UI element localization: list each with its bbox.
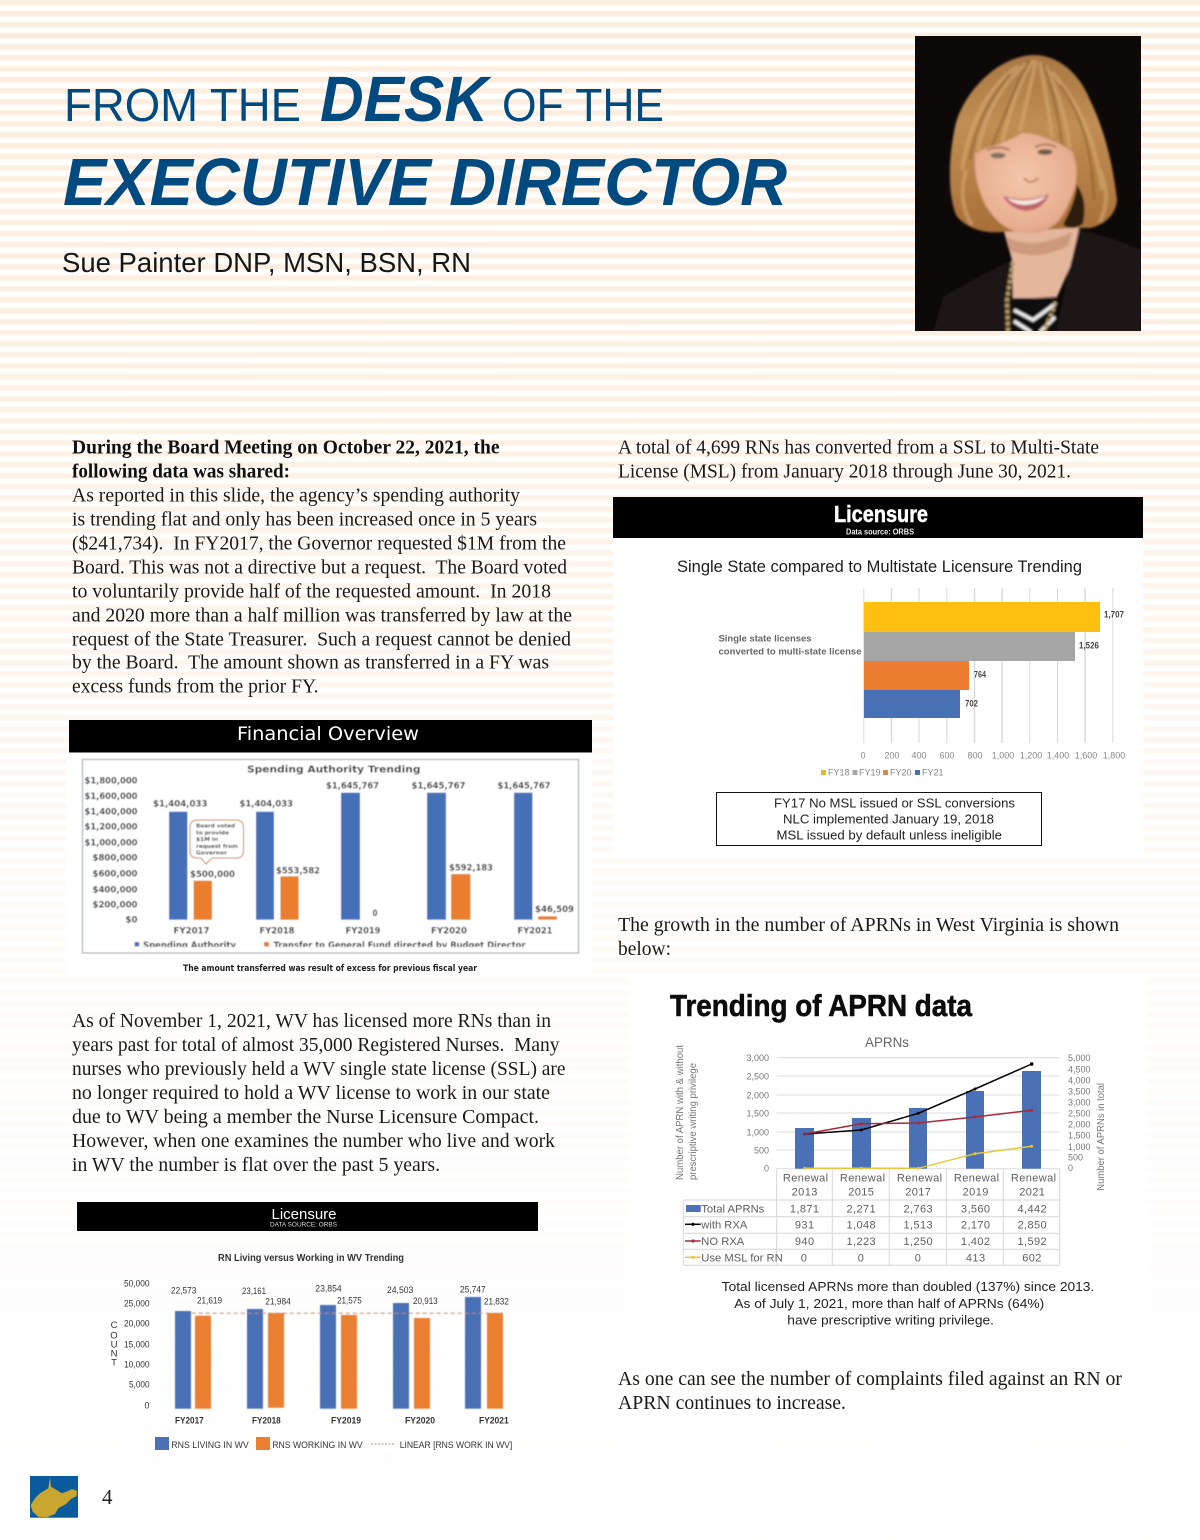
text block: board meeting intro: During the Board Meeting on October 22, 2021, the xyxy=(72,438,500,458)
legend: LINEAR [RNS WORK IN WV] xyxy=(400,1440,512,1450)
legend: FY18 xyxy=(828,768,850,778)
spending authority bar chart: $600,000 xyxy=(92,870,138,880)
spending authority bar chart: FY2019 xyxy=(346,926,380,936)
text block: board meeting intro: is trending flat and only has been increased once in 5 years xyxy=(72,510,537,530)
text block: complaints: As one can see the number of complaints filed against an RN or xyxy=(618,1369,1123,1390)
x axis labels xyxy=(175,1416,509,1426)
data table: 2017 xyxy=(905,1186,931,1198)
spending authority bar chart: Spending Authority Trending xyxy=(247,764,420,776)
combo chart: 1,500 xyxy=(1068,1130,1091,1140)
y axis labels xyxy=(124,1278,150,1412)
text block: board meeting intro: As reported in this slide, the agency’s spending authority xyxy=(72,486,520,506)
combo chart: 0 xyxy=(764,1163,769,1173)
x axis labels: FY2021 xyxy=(479,1416,509,1426)
count axis title: O xyxy=(110,1330,118,1342)
count axis title: N xyxy=(111,1348,118,1360)
panel: single state vs multistate licensure xyxy=(613,497,1143,855)
text block: RNs licensed: in WV the number is flat over the past 5 years. xyxy=(72,1155,440,1176)
spending authority bar chart: $1,400,000 xyxy=(84,808,138,818)
combo chart: 3,000 xyxy=(1068,1097,1091,1107)
data table: Renewal xyxy=(954,1172,1000,1184)
data table: 602 xyxy=(1022,1252,1042,1264)
legend: RNS LIVING IN WV xyxy=(171,1440,249,1450)
financial overview header bar xyxy=(69,720,592,752)
data table: 2015 xyxy=(848,1186,874,1198)
data table: 1,402 xyxy=(961,1236,990,1248)
horizontal bar chart: 600 xyxy=(939,750,955,760)
spending authority bar chart: $800,000 xyxy=(92,854,138,864)
horizontal bar chart: 800 xyxy=(967,750,983,760)
value labels xyxy=(171,1284,509,1308)
horizontal bar chart: 1,800 xyxy=(1103,750,1125,760)
text block: RNs licensed: no longer required to hold a WV license to work in our state xyxy=(72,1083,550,1104)
horizontal bar chart: 1,200 xyxy=(1020,750,1042,760)
horizontal bar chart: 1,526 xyxy=(1079,640,1099,650)
value labels: 22,573 xyxy=(171,1286,196,1296)
title: OF THE xyxy=(502,79,664,131)
data table: 0 xyxy=(858,1252,864,1264)
spending authority bar chart: $1,200,000 xyxy=(84,822,138,832)
data table: 1,871 xyxy=(790,1204,819,1216)
text block: board meeting intro: and 2020 more than a half million was transferred by law at the xyxy=(72,606,572,626)
data table: 1,513 xyxy=(904,1220,933,1232)
spending authority bar chart: $1,600,000 xyxy=(84,792,138,802)
value labels: 23,161 xyxy=(242,1286,266,1297)
licensure header bar xyxy=(77,1202,538,1231)
text block: complaints xyxy=(618,1369,1123,1414)
data table: 3,560 xyxy=(961,1204,990,1216)
licensure header bar: Data source: ORBS xyxy=(846,528,915,536)
combo chart xyxy=(675,1045,1107,1191)
data table: 0 xyxy=(915,1252,921,1264)
combo chart: 1,000 xyxy=(1068,1142,1091,1152)
data table: 4,442 xyxy=(1018,1204,1047,1216)
APRN caption: have prescriptive writing privilege. xyxy=(787,1312,994,1328)
data table: 940 xyxy=(795,1236,814,1248)
callout: board vote xyxy=(190,820,244,864)
combo chart: 3,000 xyxy=(746,1053,769,1063)
horizontal bar chart: 764 xyxy=(974,670,986,680)
spending authority bar chart: FY2018 xyxy=(260,926,294,936)
text block: RNs licensed: However, when one examines the number who live and work xyxy=(72,1131,555,1152)
data table: 2021 xyxy=(1019,1186,1045,1198)
spending authority bar chart: $1,645,767 xyxy=(412,782,466,792)
text block: APRN growth xyxy=(618,915,1119,960)
y axis labels: 25,000 xyxy=(124,1298,150,1310)
combo chart: Number of APRNs in total xyxy=(1096,1083,1107,1191)
y axis labels: 5,000 xyxy=(129,1380,150,1390)
value labels: 21,619 xyxy=(197,1296,222,1306)
data table: 1,048 xyxy=(847,1220,876,1232)
legend: FY19 xyxy=(859,768,881,778)
data table: NO RXA xyxy=(701,1236,745,1248)
combo chart: 4,000 xyxy=(1068,1075,1091,1085)
data table: Total APRNs xyxy=(701,1204,765,1216)
y axis labels: 10,000 xyxy=(124,1360,150,1370)
spending authority bar chart: $500,000 xyxy=(190,870,235,880)
note box: NLC implemented January 19, 2018 xyxy=(783,812,994,826)
horizontal bar chart: 1,707 xyxy=(1104,610,1124,620)
spending authority bar chart: $1,645,767 xyxy=(326,782,379,792)
panel: RN living versus working chart xyxy=(77,1202,538,1450)
callout: board vote: to provide xyxy=(196,830,230,836)
combo chart: 1,000 xyxy=(746,1127,769,1137)
horizontal bar chart: 400 xyxy=(911,750,927,760)
data table: 2,850 xyxy=(1018,1220,1047,1232)
data table xyxy=(683,1169,1060,1265)
spending authority bar chart: Transfer to General Fund directed by Budget Director xyxy=(274,941,526,951)
spending authority bar chart: Spending Authority xyxy=(143,941,236,951)
spending authority bar chart: FY2021 xyxy=(518,926,552,936)
horizontal bar chart: 702 xyxy=(965,698,978,708)
horizontal bar chart: 1,600 xyxy=(1075,750,1097,760)
text block: board meeting intro xyxy=(72,438,572,698)
combo chart: 2,500 xyxy=(1068,1108,1091,1118)
text block: RNs licensed: due to WV being a member the Nurse Licensure Compact. xyxy=(72,1107,539,1128)
horizontal bar chart: converted to multi-state license xyxy=(718,646,862,658)
value labels: 21,575 xyxy=(337,1296,362,1306)
value labels: 25,747 xyxy=(460,1284,486,1296)
data table: 1,250 xyxy=(904,1236,933,1248)
data table: Renewal xyxy=(840,1172,886,1184)
y axis labels: 0 xyxy=(144,1400,150,1412)
horizontal bar chart: Single state licenses xyxy=(718,634,812,644)
spending authority bar chart xyxy=(82,760,578,953)
text block: board meeting intro: request of the State Treasurer. Such a request cannot be denied xyxy=(72,630,571,650)
spending authority bar chart: 0 xyxy=(372,909,378,919)
spending authority bar chart: FY2017 xyxy=(174,926,210,936)
data table: Use MSL for RN xyxy=(701,1252,783,1264)
data table: 0 xyxy=(801,1252,807,1264)
panel: trending of APRN data xyxy=(629,975,1147,1335)
data table: 931 xyxy=(795,1220,814,1232)
title xyxy=(63,63,787,220)
title: DESK xyxy=(320,63,493,135)
licensure header bar xyxy=(613,497,1143,538)
spending authority bar chart: $553,582 xyxy=(276,866,320,876)
legend: FY20 xyxy=(890,768,912,778)
licensure header bar: DATA SOURCE: ORBS xyxy=(270,1222,338,1228)
y axis labels: 50,000 xyxy=(124,1278,150,1290)
title: EXECUTIVE DIRECTOR xyxy=(63,145,787,220)
combo chart: Number of APRN with & without xyxy=(675,1045,686,1180)
horizontal bar chart: 1,400 xyxy=(1047,750,1069,760)
combo chart: 2,000 xyxy=(1068,1119,1091,1129)
data table: 413 xyxy=(966,1252,985,1264)
note box: MSL issued by default unless ineligible xyxy=(776,828,1002,842)
combo chart: 4,500 xyxy=(1068,1064,1091,1074)
legend xyxy=(821,768,944,778)
text block: APRN growth: The growth in the number of APRNs in West Virginia is shown xyxy=(618,915,1119,936)
portrait photo xyxy=(915,36,1141,332)
text block: RNs licensed xyxy=(72,1011,566,1176)
text block: board meeting intro: following data was shared: xyxy=(72,462,290,482)
callout: board vote: Board voted xyxy=(196,824,235,830)
text block: MSL conversions: A total of 4,699 RNs has converted from a SSL to Multi-State xyxy=(618,438,1099,458)
text block: board meeting intro: by the Board. The amount shown as transferred in a FY was xyxy=(72,652,549,674)
licensure header bar: Licensure xyxy=(272,1207,336,1223)
text block: MSL conversions: License (MSL) from January 2018 through June 30, 2021. xyxy=(618,462,1071,482)
spending authority bar chart: $1,000,000 xyxy=(84,838,138,848)
combo chart: 500 xyxy=(754,1145,769,1155)
title: FROM THE xyxy=(64,79,301,131)
y axis labels: 20,000 xyxy=(124,1318,150,1330)
legend xyxy=(155,1437,512,1450)
horizontal bar chart: 0 xyxy=(860,750,866,760)
text block: MSL conversions xyxy=(618,438,1099,482)
note box xyxy=(716,792,1042,846)
horizontal bar chart: 200 xyxy=(884,750,900,760)
licensure header bar: Licensure xyxy=(834,501,928,527)
data table: 2,170 xyxy=(961,1220,990,1232)
text block: board meeting intro: excess funds from the prior FY. xyxy=(72,676,318,698)
spending authority bar chart: $0 xyxy=(126,916,138,926)
data table: Renewal xyxy=(783,1172,829,1184)
data table: 2013 xyxy=(792,1186,818,1198)
data table: with RXA xyxy=(700,1220,748,1232)
icon: West Virginia state map xyxy=(30,1476,78,1518)
combo chart: prescriptive writing privilege xyxy=(688,1063,699,1180)
text block: RNs licensed: years past for total of almost 35,000 Registered Nurses. Many xyxy=(72,1035,560,1056)
x axis labels: FY2020 xyxy=(405,1416,435,1426)
spending authority bar chart: FY2020 xyxy=(431,926,467,936)
APRN caption xyxy=(722,1279,1094,1328)
combo chart: 0 xyxy=(1068,1163,1073,1173)
combo chart: 2,500 xyxy=(746,1071,769,1081)
spending authority bar chart: $1,645,767 xyxy=(498,782,550,792)
horizontal bar chart: 1,000 xyxy=(992,750,1014,760)
combo chart: 3,500 xyxy=(1068,1086,1091,1096)
value labels: 23,854 xyxy=(315,1284,342,1294)
data table: 1,592 xyxy=(1018,1236,1047,1248)
x axis labels: FY2019 xyxy=(331,1416,361,1426)
byline: Sue Painter DNP, MSN, BSN, RN xyxy=(62,247,471,278)
spending authority bar chart: $46,509 xyxy=(535,905,574,915)
callout: board vote: Governor xyxy=(196,850,228,856)
value labels: 21,984 xyxy=(265,1296,291,1308)
value labels: 24,503 xyxy=(387,1285,413,1296)
spending authority bar chart: $200,000 xyxy=(92,900,138,910)
combo chart: 1,500 xyxy=(746,1108,769,1118)
count axis title: U xyxy=(111,1340,118,1350)
combo chart: 500 xyxy=(1068,1152,1083,1162)
financial overview caption: The amount transferred was result of excess for previous fiscal year xyxy=(183,964,478,974)
text block: board meeting intro: to voluntarily provide half of the requested amount. In 2018 xyxy=(72,582,551,602)
APRN caption: Total licensed APRNs more than doubled (137%) since 2013. xyxy=(722,1279,1094,1294)
legend: FY21 xyxy=(922,768,944,778)
spending authority bar chart: $1,404,033 xyxy=(153,800,208,810)
y axis labels: 15,000 xyxy=(124,1340,150,1350)
text block: complaints: APRN continues to increase. xyxy=(618,1393,846,1414)
horizontal bar chart xyxy=(718,588,1125,778)
page number: 4 xyxy=(102,1485,113,1509)
combo chart: 2,000 xyxy=(746,1090,769,1100)
legend: RNS WORKING IN WV xyxy=(272,1440,363,1450)
callout: board vote: $1M in xyxy=(196,837,219,843)
text block: board meeting intro: Board. This was not a directive but a request. The Board voted xyxy=(72,558,567,578)
chart title: APRNs xyxy=(865,1034,909,1050)
note box: FY17 No MSL issued or SSL conversions xyxy=(774,796,1016,810)
panel: financial overview xyxy=(66,720,592,977)
panel heading: Trending of APRN data xyxy=(670,988,973,1023)
text block: APRN growth: below: xyxy=(618,939,671,960)
bars xyxy=(175,1297,503,1409)
text block: RNs licensed: As of November 1, 2021, WV has licensed more RNs than in xyxy=(72,1011,551,1032)
APRN caption: As of July 1, 2021, more than half of APRNs (64%) xyxy=(734,1296,1044,1311)
financial overview header bar: Financial Overview xyxy=(237,723,419,745)
x axis labels: FY2018 xyxy=(252,1416,281,1426)
combo chart: 5,000 xyxy=(1068,1053,1091,1063)
data table: 2019 xyxy=(963,1186,989,1198)
count axis title: T xyxy=(111,1358,117,1368)
spending authority bar chart: $592,183 xyxy=(449,864,493,874)
text block: RNs licensed: nurses who previously held a WV single state license (SSL) are xyxy=(72,1059,566,1080)
chart title: Single State compared to Multistate Licensure Trending xyxy=(677,557,1082,576)
count axis title: C xyxy=(111,1320,118,1331)
callout: board vote: request from xyxy=(196,844,238,850)
spending authority bar chart: $1,404,033 xyxy=(240,800,293,810)
spending authority bar chart: $1,800,000 xyxy=(84,776,138,786)
value labels: 21,832 xyxy=(484,1296,509,1308)
count axis title xyxy=(110,1320,118,1368)
text block: board meeting intro: ($241,734). In FY2017, the Governor requested $1M from the xyxy=(72,534,566,554)
chart title: RN Living versus Working in WV Trending xyxy=(218,1252,404,1264)
data table: 2,763 xyxy=(904,1204,933,1216)
value labels: 20,913 xyxy=(413,1296,438,1307)
data table: Renewal xyxy=(897,1172,943,1184)
x axis labels: FY2017 xyxy=(175,1416,204,1426)
data table: Renewal xyxy=(1011,1172,1057,1184)
spending authority bar chart: $400,000 xyxy=(92,886,138,896)
data table: 2,271 xyxy=(847,1204,876,1216)
data table: 1,223 xyxy=(847,1236,876,1248)
